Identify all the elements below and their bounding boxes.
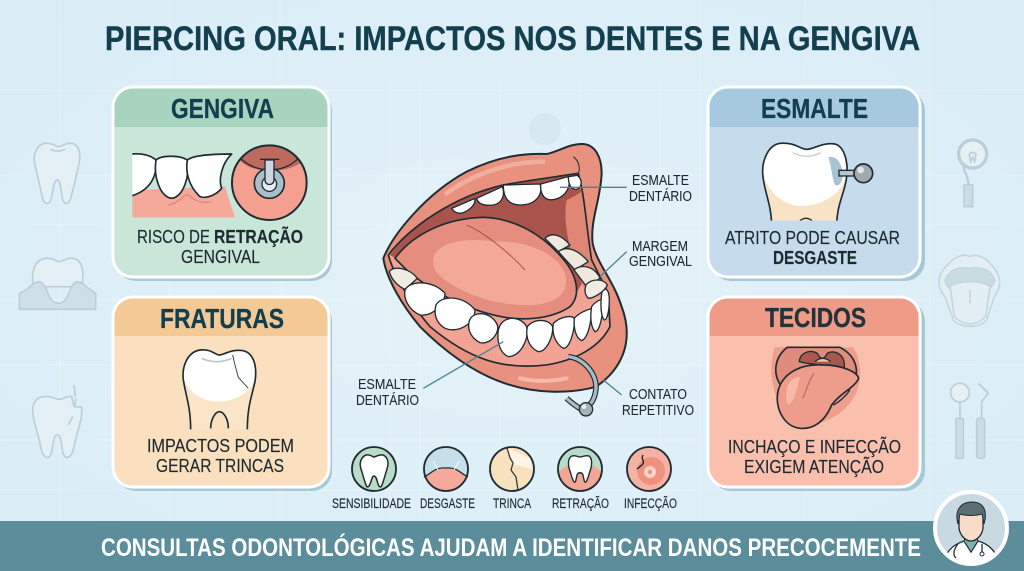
text: esmalte: DESGASTE bbox=[773, 248, 857, 268]
callout: esmalte dentário right: ESMALTE bbox=[632, 173, 689, 189]
heading: fraturas: FRATURAS bbox=[160, 303, 284, 334]
footer banner bbox=[0, 521, 1024, 571]
illustration: gum retraction with piercing bbox=[132, 143, 307, 220]
mouth interior bbox=[388, 173, 610, 366]
panel: fraturas bbox=[113, 297, 332, 491]
icon: retração bbox=[558, 447, 602, 492]
icon labels: SENSIBILIDADE bbox=[332, 496, 411, 511]
tongue bbox=[395, 217, 577, 319]
background icon: gum and tooth bbox=[19, 258, 96, 309]
text: tecidos: EXIGEM ATENÇÃO bbox=[744, 456, 884, 477]
background icon: dental instruments bbox=[951, 383, 988, 458]
callout lines bbox=[423, 187, 627, 395]
heading: tecidos: TECIDOS bbox=[765, 302, 866, 333]
callout: esmalte dentário right: DENTÁRIO bbox=[629, 188, 692, 205]
callout: esmalte dentário left: ESMALTE bbox=[358, 377, 416, 393]
illustration: cracked tooth bbox=[183, 350, 256, 430]
icon labels: TRINCA bbox=[493, 496, 531, 511]
text: fraturas: IMPACTOS PODEM bbox=[147, 436, 294, 456]
text: fraturas: GERAR TRINCAS bbox=[156, 456, 284, 476]
illustration: tooth with ball piercing bbox=[763, 143, 873, 227]
heading: gengiva: GENGIVA bbox=[171, 93, 274, 124]
panel: tecidos bbox=[708, 297, 925, 491]
callout: contato repetitivo: CONTATO bbox=[629, 387, 687, 403]
icon labels: RETRAÇÃO bbox=[552, 496, 609, 511]
icon: desgaste bbox=[424, 447, 468, 491]
callout: esmalte dentário left: DENTÁRIO bbox=[356, 392, 419, 409]
icon labels: INFECÇÃO bbox=[624, 496, 677, 511]
illustration: swollen tongue bbox=[771, 347, 860, 428]
icon: infecção bbox=[627, 447, 671, 491]
text: gengiva: RETRAÇÃO bbox=[214, 226, 303, 247]
panel: esmalte bbox=[708, 87, 925, 281]
lower teeth bbox=[389, 268, 609, 357]
background icon: dental mirror bbox=[959, 140, 987, 207]
text: esmalte: ATRITO PODE CAUSAR bbox=[725, 228, 900, 248]
icon: doctor avatar bbox=[935, 492, 1007, 566]
icon: sensibilidade bbox=[352, 447, 396, 491]
background icon: tooth bbox=[34, 143, 80, 204]
central illustration: open mouth with piercing bbox=[383, 144, 627, 416]
upper teeth bbox=[452, 175, 581, 213]
background icon: broken tooth bbox=[33, 385, 82, 458]
panel: gengiva bbox=[113, 87, 332, 281]
callout: margem gengival: MARGEM bbox=[632, 239, 688, 255]
lips bbox=[383, 144, 627, 392]
heading: esmalte: ESMALTE bbox=[761, 93, 868, 124]
icon: trinca bbox=[490, 447, 534, 491]
text: gengiva: RISCO DE bbox=[137, 227, 210, 247]
lip ring bbox=[567, 357, 596, 416]
icon labels: DESGASTE bbox=[420, 496, 475, 511]
callout: margem gengival: GENGIVAL bbox=[629, 254, 692, 270]
text: gengiva: GENGIVAL bbox=[181, 247, 260, 267]
text: tecidos: INCHAÇO E INFECÇÃO bbox=[728, 436, 901, 457]
background icon: mouth and tongue bbox=[939, 255, 1000, 326]
far lower teeth bbox=[545, 235, 600, 287]
callout: contato repetitivo: REPETITIVO bbox=[622, 403, 694, 419]
